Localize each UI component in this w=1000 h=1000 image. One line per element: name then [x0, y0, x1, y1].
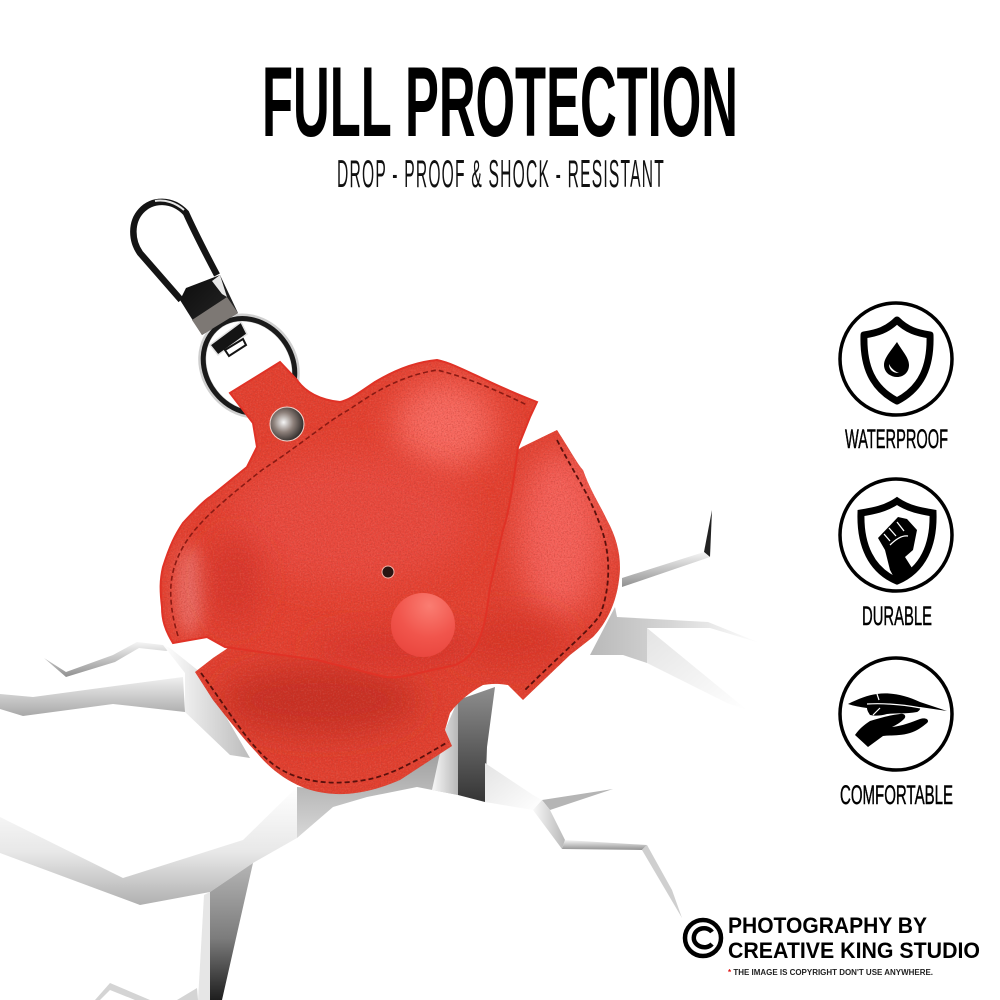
keychain hook and ring [133, 200, 315, 433]
ring [183, 299, 315, 433]
hook [133, 200, 217, 300]
feature: comfortable [840, 658, 953, 810]
icon: feather over hand [840, 658, 952, 770]
swivel connector [210, 322, 247, 356]
back pouch [190, 425, 625, 800]
icon: shield with water drop [840, 303, 952, 415]
cracked white surface [0, 510, 760, 1000]
back stitching [201, 440, 608, 783]
front flap [155, 355, 545, 685]
flap stitching [171, 370, 527, 636]
feature: waterproof [840, 303, 952, 454]
rivet [270, 407, 304, 441]
pinhole [382, 566, 394, 578]
snap button [391, 593, 455, 657]
swivel block [180, 275, 238, 335]
copyright credit [685, 913, 980, 977]
flap edge [161, 360, 537, 677]
copyright note: * THE IMAGE IS COPYRIGHT DON'T USE ANYWHERE. [728, 968, 933, 977]
credit line one: PHOTOGRAPHY BY [728, 913, 927, 938]
credit line two: CREATIVE KING STUDIO [728, 938, 980, 963]
subtitle: DROP - PROOF & SHOCK - RESISTANT [337, 153, 664, 196]
icon: shield with raised fist [840, 479, 952, 591]
feature: durable [840, 479, 952, 631]
icon: copyright symbol [685, 920, 721, 956]
leather case [155, 355, 625, 800]
label: DURABLE [862, 601, 932, 631]
